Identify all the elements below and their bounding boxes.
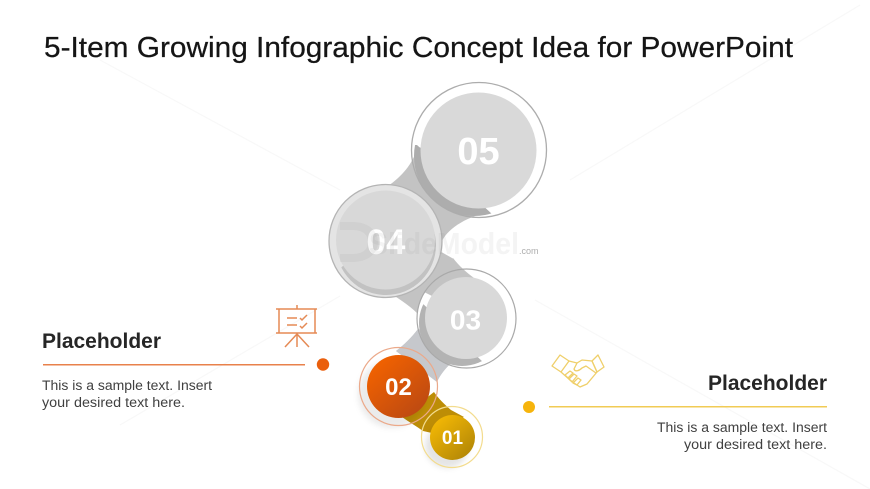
right heading: Placeholder bbox=[708, 372, 827, 395]
left panel: placeholder bbox=[42, 305, 329, 410]
title: 5-Item Growing Infographic Concept Idea for PowerPoint bbox=[44, 32, 793, 64]
growing circles diagram bbox=[329, 82, 546, 468]
connector: 04 to 03 bbox=[385, 240, 474, 314]
circle 01: 01 bbox=[442, 428, 463, 449]
circle 04 bbox=[329, 184, 442, 298]
circle 04: 04 bbox=[367, 223, 406, 262]
circle 03 bbox=[396, 258, 516, 382]
connector: 05 to 04 bbox=[388, 147, 484, 246]
icon: handshake bbox=[552, 355, 604, 387]
circle 01 bbox=[422, 406, 482, 468]
circle 02 bbox=[358, 348, 438, 428]
left body text: This is a sample text. Insert bbox=[42, 378, 212, 393]
right dot bbox=[523, 401, 535, 413]
connector: 03 to 02 bbox=[396, 320, 460, 382]
icon: presentation board bbox=[276, 305, 317, 347]
right panel: placeholder bbox=[523, 355, 827, 452]
circle 03: 03 bbox=[450, 304, 481, 336]
circle 05 bbox=[412, 82, 546, 218]
watermark: SlideModel bbox=[369, 226, 519, 261]
circle 05: 05 bbox=[457, 131, 500, 173]
connector: 02 to 01 bbox=[402, 392, 464, 433]
right divider line bbox=[549, 406, 827, 408]
left dot bbox=[317, 358, 329, 371]
left heading: Placeholder bbox=[42, 330, 161, 353]
left divider line bbox=[43, 364, 305, 366]
left body text: your desired text here. bbox=[42, 395, 185, 410]
right body text: This is a sample text. Insert bbox=[657, 420, 827, 435]
right body text: your desired text here. bbox=[684, 437, 827, 452]
watermark: .com bbox=[519, 246, 539, 256]
circle 02: 02 bbox=[385, 374, 412, 401]
